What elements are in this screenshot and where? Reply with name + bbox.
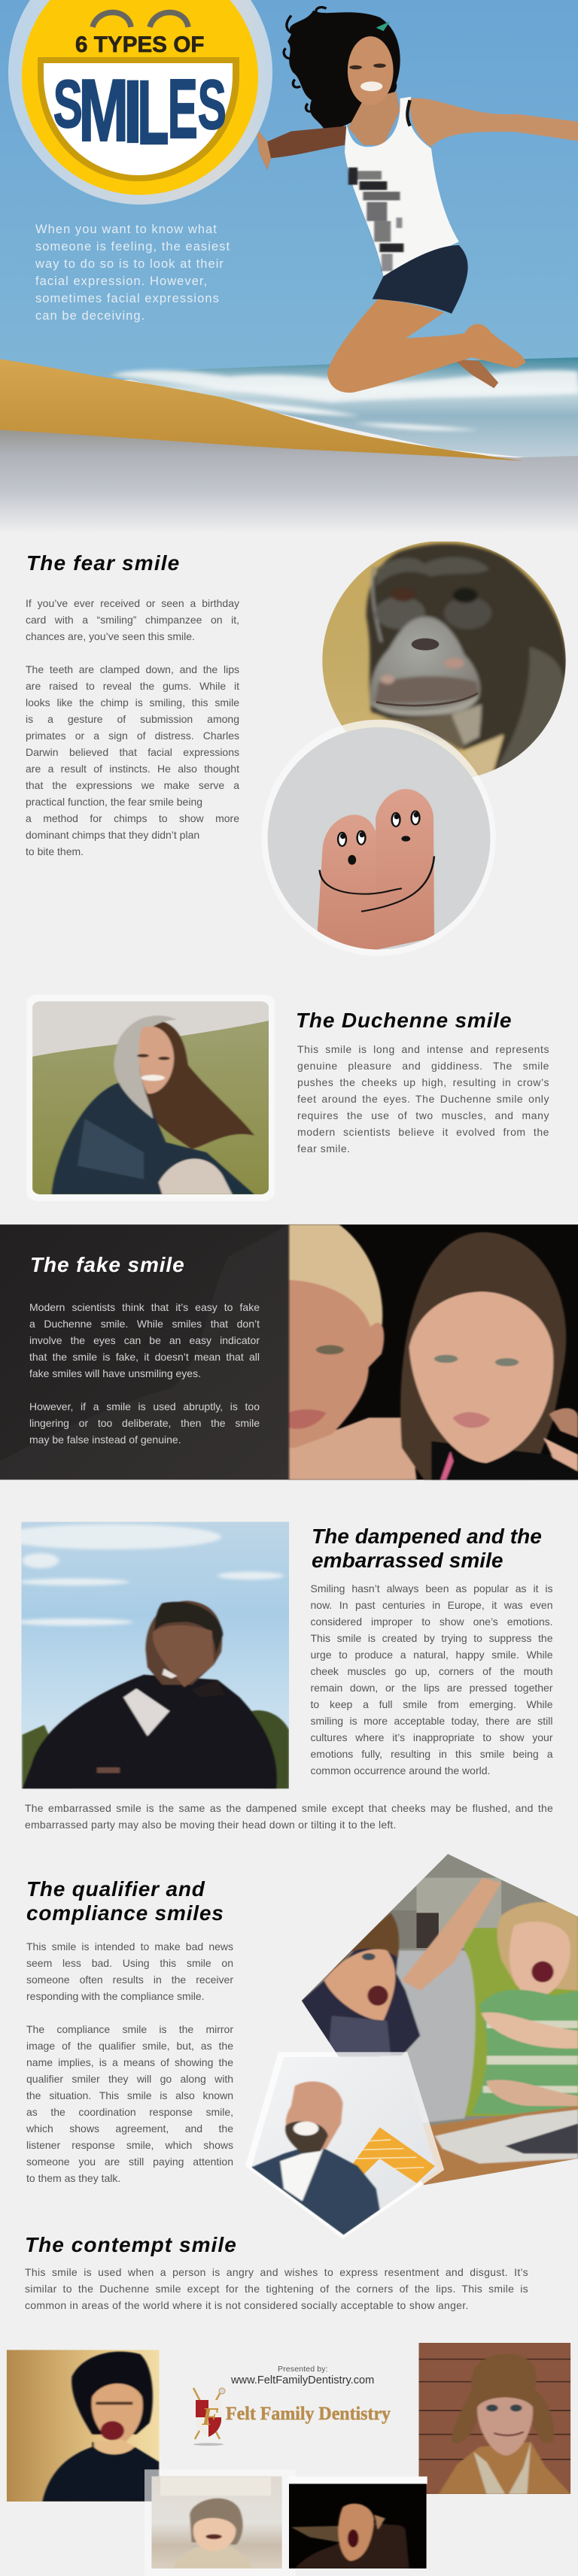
text: fear smile: to bite them. (26, 845, 84, 857)
title: smiles: S (53, 66, 83, 142)
text: duchenne smile: feet around the eyes. The Duchenne smile only (297, 1092, 549, 1104)
text: duchenne smile: modern scientists believe it evolved from the (297, 1125, 549, 1137)
smiley eyes (93, 12, 188, 27)
text: dampened smile: emotions fully, resulting in this smile being a (310, 1748, 552, 1760)
woman jumping (256, 8, 578, 393)
left arm (256, 126, 346, 170)
text: fear smile: primates or a sign of distress. Charles (26, 730, 239, 742)
text: fear smile (26, 597, 239, 857)
photo card: smiling woman in a field (0, 1002, 578, 1481)
text: qualifier and compliance smiles: qualifier smiler they will go along with (26, 2073, 233, 2085)
text: duchenne smile: fear smile. (297, 1142, 351, 1154)
intro text: can be deceiving. (35, 309, 145, 323)
text: embarrassed smile: The embarrassed smile is the same as the dampened smile except that cheeks may be flushed, and the (25, 1802, 553, 1814)
text: qualifier and compliance smiles: someone often results in the receiver (26, 1974, 233, 1986)
mouth (38, 57, 239, 181)
title: smiles: I (123, 62, 142, 162)
photo: chimpanzee (72, 541, 566, 2566)
text: fear smile: If you’ve ever received or seen a birthday (26, 597, 239, 609)
text: qualifier and compliance smiles: The compliance smile is the mirror (26, 2023, 233, 2035)
website url: www.FeltFamilyDentistry.com (231, 2374, 374, 2386)
dry sand (0, 360, 524, 461)
photo: laughing baby (151, 2476, 282, 2568)
text: fake smile: However, if a smile is used abruptly, is too (29, 1400, 260, 1412)
photo: laughing man in pentagon (245, 2052, 444, 2239)
orange chevron scribble (348, 2127, 435, 2183)
photo: excited kids (302, 1854, 578, 2185)
hero logo: smiley badge (8, 0, 272, 205)
text: fear smile: card with a “smiling” chimpanzee on it, (26, 614, 239, 626)
text: qualifier and compliance smiles: seem less bad. Using this smile on (26, 1957, 233, 1969)
text: fear smile: Darwin believed that facial expressions (26, 746, 239, 758)
text: dampened smile: smiling is more acceptable today, there are still (310, 1715, 552, 1727)
text: fear smile: that the expressions we make serve a (26, 779, 239, 791)
text: contempt smile: This smile is used when a person is angry and wishes to express resentment and disgust. It’s (25, 2266, 528, 2278)
text: fear smile: is a gesture of submission among (26, 713, 239, 725)
heading: the qualifier and compliance smiles (26, 1877, 224, 1925)
photo: screaming boy (7, 2350, 160, 2502)
text: qualifier and compliance smiles: responding with the compliance smile. (26, 1990, 205, 2002)
text: fake smile: may be false instead of genuine. (29, 1434, 181, 1446)
logo: felt family dentistry (193, 2387, 391, 2446)
text: fake smile: involve the eyes can be an easy indicator (29, 1334, 260, 1346)
heading: the contempt smile: The contempt smile (25, 2233, 237, 2256)
intro text: way to do so is to look at their (35, 257, 224, 271)
heading: the qualifier and compliance smiles: compliance smiles (26, 1901, 224, 1925)
photo: embarrassed man covering face (21, 1522, 289, 1789)
crest: F (201, 2403, 219, 2431)
text: fake smile: a Duchenne smile. While smiles that don’t (29, 1318, 260, 1330)
top print (348, 168, 403, 271)
title: smiles: S (198, 66, 227, 144)
text: qualifier and compliance smiles: image of the qualifier smile, but, as the (26, 2040, 233, 2052)
intro text: sometimes facial expressions (35, 292, 220, 305)
title: 6 types of: 6 TYPES OF (75, 32, 205, 57)
text: dampened smile: urge to produce a natural, happy smile. While (310, 1649, 552, 1661)
leg (327, 299, 525, 393)
photo: screaming girl (289, 2483, 427, 2568)
text: fear smile: The teeth are clamped down, and the lips (26, 663, 239, 675)
text: dampened smile: remain down, or the lips are pressed together (310, 1682, 552, 1694)
logo wordmark: Felt Family Dentistry (226, 2402, 391, 2424)
presented by: Presented by: (278, 2365, 328, 2374)
text: qualifier and compliance smiles: the situation. This smile is also known (26, 2089, 233, 2101)
jacket (52, 1082, 254, 1194)
photos: excited kids and laughing man (245, 1854, 578, 2238)
title: smiles (53, 62, 227, 163)
heading: the dampened and the embarrassed smile: embarrassed smile (312, 1549, 503, 1572)
text: qualifier and compliance smiles: listener response smile, which shows (26, 2139, 233, 2151)
text: fear smile: looks like the chimp is smiling, this smile (26, 696, 239, 708)
intro text (35, 223, 230, 323)
text: fake smile (29, 1301, 260, 1446)
text: dampened smile: to keep a full smile from emerging. While (310, 1698, 552, 1710)
photo: mother and daughter faces (289, 1224, 578, 1479)
sea and waves (99, 357, 578, 463)
text: duchenne smile: This smile is long and intense and represents (297, 1042, 549, 1054)
dark panel (0, 1224, 289, 1479)
hair (284, 8, 400, 139)
face (138, 1027, 174, 1094)
text: qualifier and compliance smiles: This smile is intended to make bad news (26, 1940, 233, 1952)
text: duchenne smile (297, 1042, 549, 1154)
text: qualifier and compliance smiles: which shows agreement, and the (26, 2122, 233, 2135)
title: smiles: E (168, 62, 198, 156)
text: duchenne smile: genuine pleasure and giddiness. The smile (297, 1059, 549, 1071)
photo frames (144, 2469, 427, 2576)
text: fear smile: are a result of instincts. He also thought (26, 763, 239, 775)
text: contempt smile: similar to the Duchenne smile except for the tightening of the corners of the lips. This smile is (25, 2283, 528, 2295)
bottom photo collage (6, 2343, 570, 2568)
crest (193, 2388, 225, 2446)
shorts (373, 245, 468, 314)
text: contempt smile (25, 2266, 528, 2311)
heading: the fake smile: The fake smile (30, 1253, 185, 1276)
text: dampened smile: Smiling hasn’t always been as popular as it is (310, 1582, 552, 1594)
text: fake smile: fake smiles will have unsmiling eyes. (29, 1367, 201, 1379)
text: fear smile: practical function, the fear smile being (26, 796, 202, 808)
hero: beach photo with jumping woman (0, 0, 578, 763)
intro text: facial expression. However, (35, 275, 208, 288)
text: qualifier and compliance smiles: someone you are still paying attention (26, 2156, 233, 2168)
right arm (410, 98, 578, 147)
text: fake smile: lingering or too deliberate, then the smile (29, 1417, 260, 1429)
text: dampened smile: cheek muscles go up, corners of the mouth (310, 1665, 552, 1677)
neck and face (348, 92, 400, 145)
text: dampened smile: common occurrence around the world. (310, 1764, 490, 1776)
text: qualifier and compliance smiles (26, 1940, 233, 2184)
text: fear smile: dominant chimps that they didn’t plan (26, 829, 199, 841)
text: fear smile: are raised to reveal the gums. While it (26, 680, 239, 692)
text: fake smile: Modern scientists think that it’s easy to fake (29, 1301, 260, 1313)
heading: the duchenne smile: The Duchenne smile (296, 1009, 512, 1032)
heading: the fear smile: The fear smile (26, 551, 180, 575)
text: duchenne smile: pushes the cheeks up high, resulting in crow’s (297, 1076, 549, 1088)
text: fear smile: a method for chimps to show more (26, 812, 239, 824)
wet sand foreground (0, 428, 578, 542)
heading: the dampened and the embarrassed smile (312, 1525, 542, 1572)
text: qualifier and compliance smiles: as the coordination response smile, (26, 2106, 233, 2118)
text: fake smile: that the smile is fake, it doesn’t mean that all (29, 1351, 260, 1363)
text: dampened smile: This smile is created by trying to suppress the (310, 1632, 552, 1644)
hood (114, 1015, 177, 1119)
text: qualifier and compliance smiles: name implies, is a means of showing the (26, 2056, 233, 2068)
heading: the qualifier and compliance smiles: The qualifier and (26, 1877, 205, 1901)
photo: man in fur hat (418, 2343, 570, 2494)
torn jeans (159, 1159, 236, 1194)
text: dampened smile: now. In past centuries in Europe, it was even (310, 1599, 552, 1611)
back leg and foot (453, 360, 498, 388)
heading: the dampened and the embarrassed smile: The dampened and the (312, 1525, 542, 1548)
flowing hair (136, 1020, 254, 1149)
title: smiles: L (137, 62, 169, 163)
text: dampened smile: cultures where it’s inappropriate to show your (310, 1731, 552, 1743)
text: embarrassed smile (25, 1802, 553, 1831)
photo: finger puppets (268, 719, 491, 949)
text: duchenne smile: requires the use of two muscles, and many (297, 1109, 549, 1121)
text: embarrassed smile: embarrassed party may also be moving their head down or tilting it to the left. (25, 1819, 397, 1831)
text: dampened smile (310, 1582, 553, 1776)
text: contempt smile: common in areas of the world where it is not considered socially acceptable to show anger. (25, 2299, 469, 2311)
text: dampened smile: considered improper to show one’s emotions. (310, 1616, 552, 1628)
text: qualifier and compliance smiles: to them as they talk. (26, 2172, 120, 2184)
text: fear smile: chances are, you’ve seen this smile. (26, 630, 195, 642)
title: smiles: M (78, 62, 129, 160)
intro text: someone is feeling, the easiest (35, 240, 230, 253)
top (345, 97, 459, 276)
intro text: When you want to know what (35, 223, 218, 236)
